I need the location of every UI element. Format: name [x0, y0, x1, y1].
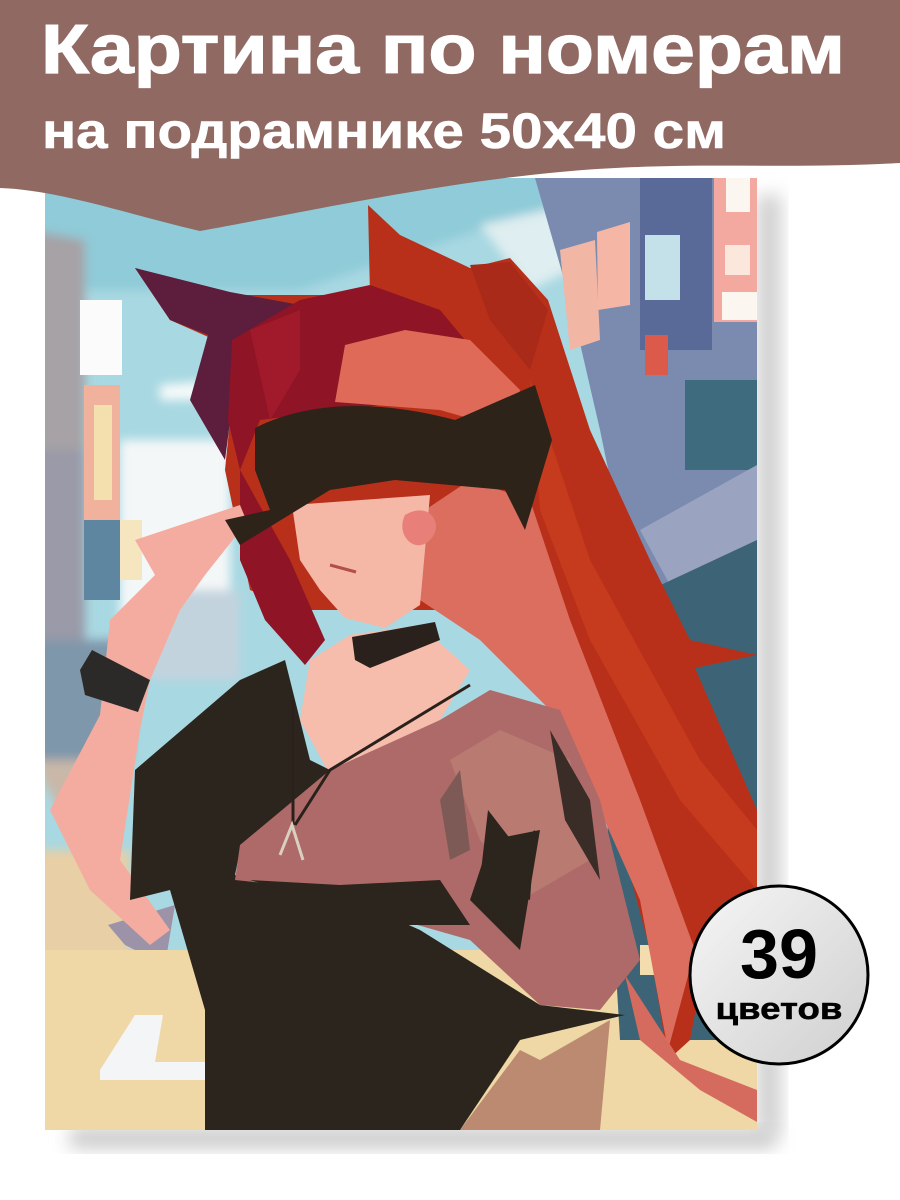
character hair: [135, 205, 757, 1122]
character face and skin: [50, 495, 610, 1130]
canvas shadow: [70, 195, 781, 1148]
title: Картина по номерам: [41, 10, 845, 88]
mouth: [330, 565, 356, 572]
blindfold: [225, 385, 552, 545]
header banner: [0, 0, 900, 231]
painting background: [30, 170, 757, 1130]
mauve shirt: [235, 690, 640, 1010]
subtitle: на подрамнике 50х40 см: [42, 103, 726, 159]
watch: [80, 650, 150, 712]
badge: colour count: 39: [740, 915, 818, 993]
choker: [352, 622, 440, 668]
black shirt: [130, 660, 625, 1130]
badge: colour count: цветов: [716, 991, 842, 1026]
badge: colour count: [690, 886, 868, 1064]
necklace: [280, 685, 470, 860]
